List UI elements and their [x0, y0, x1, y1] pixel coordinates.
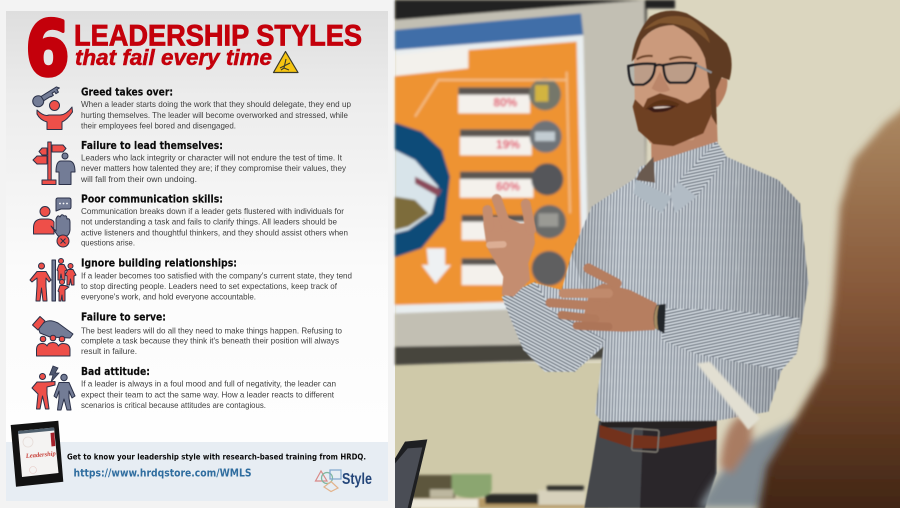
text: communication: [81, 206, 348, 247]
text: greed: their employees feel bored and disengaged.: [81, 121, 236, 131]
nose: [652, 72, 670, 92]
stat rows: 19%: [496, 137, 520, 151]
neck: [651, 113, 718, 193]
trousers: [584, 421, 717, 508]
footer call to action: Get to know your leadership style with research-based training from HRDQ.: [67, 452, 366, 461]
text: lead themselves: Leaders who lack integrity or character will not endure the test of time. It: [81, 152, 343, 162]
title: LEADERSHIP STYLES: [74, 20, 362, 52]
text: greed: [81, 99, 351, 131]
text: relationships: [81, 271, 352, 301]
icon: bad attitude figures: [32, 366, 75, 410]
icon: people behind wall: [30, 258, 76, 301]
text: communication: questions arise.: [81, 237, 135, 247]
photo: presenter in front of projected slide: [395, 0, 900, 508]
icon: warning triangle: [274, 52, 298, 72]
beard: [633, 87, 712, 146]
arrow: [422, 248, 451, 283]
text: bad attitude: expect their team to act the same way. How a leader reacts to different: [81, 389, 335, 399]
text: bad attitude: scenarios is critical because attitudes are contagious.: [81, 400, 266, 410]
stat rows: 60%: [496, 180, 520, 194]
watch: [654, 304, 666, 333]
text: bad attitude: If a leader is always in a foul mood and full of negativity, the leader can: [81, 379, 336, 389]
eyebrows: [637, 56, 692, 59]
logo: style: Style: [342, 471, 372, 488]
desk items and laptop: [395, 439, 585, 508]
text: serve: complete a task because they think it's beneath their position will always: [81, 335, 339, 345]
text: greed: hurting themselves. The leader will become overworked and stressed, while: [81, 110, 348, 120]
icon: tablet with booklet: Leadership: [25, 450, 57, 460]
panel: infographic poster: [0, 0, 395, 508]
big number 6: 6: [26, 4, 70, 93]
heading: relationships: Ignore building relationships:: [81, 256, 237, 269]
text: communication: Communication breaks down if a leader gets flustered with individuals for: [81, 206, 344, 216]
glasses: [628, 63, 712, 85]
presenter: [483, 11, 808, 508]
text: communication: active listeners and thoughtful thinkers, and they should assist others when: [81, 227, 348, 237]
wall: [395, 0, 900, 508]
text: relationships: to stop directing people. Leaders need to set expectations, keep track of: [81, 281, 338, 291]
text: relationships: If a leader becomes too satisfied with the company's current state, they tend: [81, 271, 352, 281]
heading: bad attitude: Bad attitude:: [81, 365, 150, 378]
subtitle: that fail every time: [75, 45, 272, 70]
footer band: [6, 442, 388, 501]
text: lead themselves: [80, 152, 347, 184]
text: serve: result in failure.: [81, 346, 137, 356]
text: relationships: everyone's work, and hold everyone accountable.: [81, 291, 256, 301]
footer url: https://www.hrdqstore.com/WMLS: [74, 468, 252, 480]
forearm sleeve: [662, 308, 800, 370]
collar: [633, 142, 727, 213]
face: [634, 23, 712, 143]
heading: greed: Greed takes over:: [81, 86, 173, 99]
text: bad attitude: [81, 379, 336, 410]
heading: serve: Failure to serve:: [81, 311, 166, 324]
faint lines: [415, 72, 570, 213]
text: greed: When a leader starts doing the work that they should delegate, they end up: [81, 99, 351, 109]
text: lead themselves: never matters how talented they are; if they compromise their values, they: [81, 163, 347, 173]
text: serve: The best leaders will do all they need to make things happen. Refusing to: [81, 325, 342, 335]
gesturing right hand: [550, 268, 657, 332]
belt: [599, 419, 717, 452]
stat rows: 80%: [493, 96, 518, 110]
text: serve: [81, 325, 342, 356]
icon: serving hand: [32, 316, 73, 356]
hair: [632, 11, 732, 125]
mouth: [647, 105, 676, 112]
head: [628, 11, 732, 146]
projection screen: [395, 0, 675, 365]
heading: communication: Poor communication skills:: [81, 192, 223, 205]
raised left hand: [483, 199, 535, 297]
icon: greed key: [31, 83, 72, 130]
text: communication: not understanding a task and fails to clarify things. All leaders should be: [81, 217, 337, 227]
shirt torso and sleeve: [502, 142, 808, 422]
ear: [710, 78, 727, 107]
icon: communication hand: [34, 198, 71, 247]
icon: signpost: [33, 142, 75, 184]
stat rows: [458, 78, 566, 286]
blurred foreground audience member: [697, 100, 900, 508]
heading: lead themselves: Failure to lead themselves:: [81, 139, 223, 152]
text: lead themselves: will fall from their own undoing.: [80, 174, 197, 184]
octagon graphic: [395, 123, 450, 257]
slide body: [395, 35, 588, 313]
icon: tablet with booklet: [11, 421, 63, 487]
logo: style: [316, 470, 372, 492]
slide header: [395, 13, 583, 50]
